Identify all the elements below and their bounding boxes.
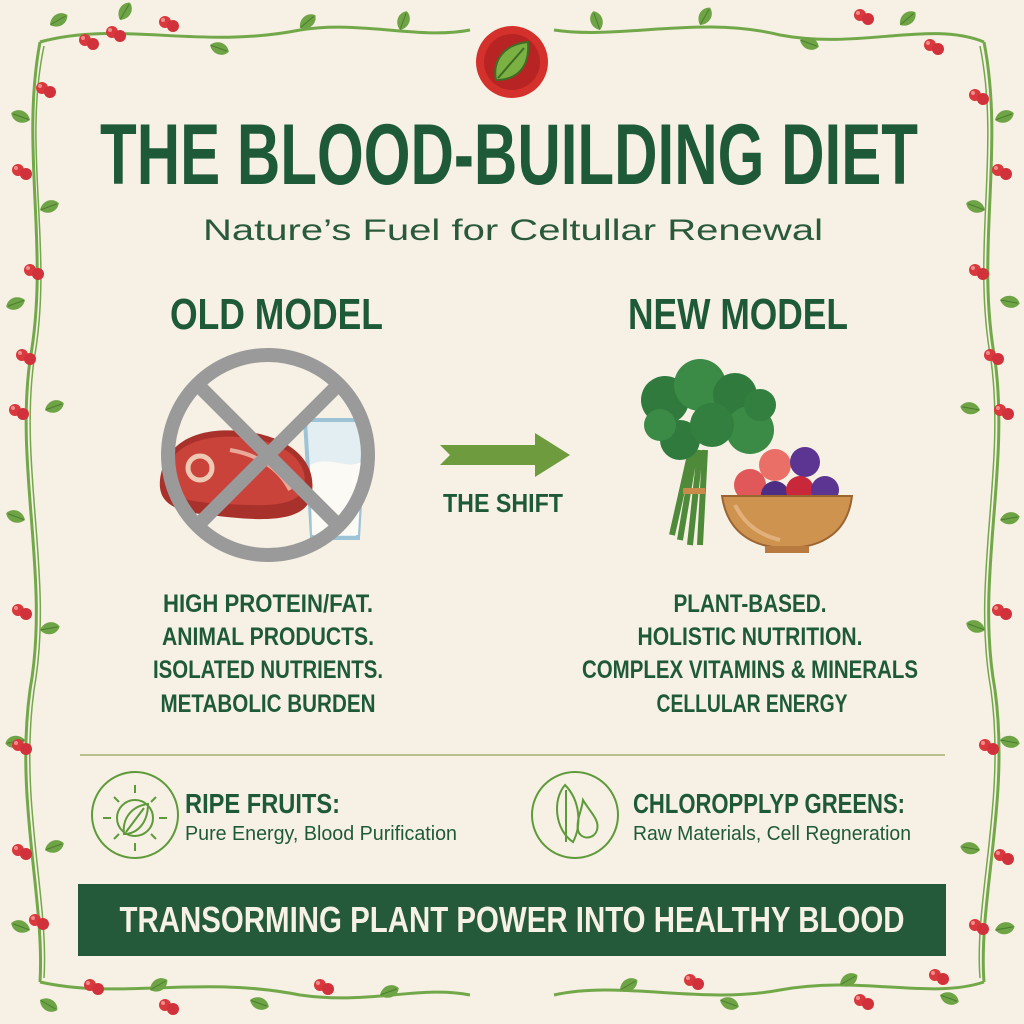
text: new model list xyxy=(582,590,918,718)
text: ripe fruits: Pure Energy, Blood Purification xyxy=(185,823,457,845)
heading: old model: OLD MODEL xyxy=(170,290,383,339)
text: old model list: ANIMAL PRODUCTS. xyxy=(162,623,374,651)
text: chlorophyll greens: CHLOROPPLYP GREENS: xyxy=(633,788,905,819)
text: new model list: CELLULAR ENERGY xyxy=(656,690,848,718)
text: old model list: HIGH PROTEIN/FAT. xyxy=(163,590,373,618)
text: new model list: PLANT-BASED. xyxy=(674,590,826,618)
arrow: the shift xyxy=(440,433,570,518)
text: new model list: HOLISTIC NUTRITION. xyxy=(638,623,862,651)
heading: new model: NEW MODEL xyxy=(628,290,848,339)
text: old model list: ISOLATED NUTRIENTS. xyxy=(153,656,383,684)
subtitle: Nature’s Fuel for Celtullar Renewal xyxy=(203,214,823,247)
text: old model list: METABOLIC BURDEN xyxy=(160,690,376,718)
text: ripe fruits: RIPE FRUITS: xyxy=(185,788,340,819)
text: new model list: COMPLEX VITAMINS & MINERALS xyxy=(582,656,918,684)
illustration: meat and milk crossed out xyxy=(160,355,368,555)
text: old model list xyxy=(153,590,383,718)
text: chlorophyll greens xyxy=(633,788,911,845)
icon: leaf and drop xyxy=(532,772,618,858)
icon: blood cell with leaf xyxy=(476,26,548,98)
illustration: greens and fruit bowl xyxy=(641,359,852,553)
banner xyxy=(78,884,946,956)
text: ripe fruits xyxy=(185,788,457,845)
arrow: the shift: THE SHIFT xyxy=(443,488,563,518)
text: chlorophyll greens: Raw Materials, Cell Regneration xyxy=(633,823,911,845)
icon: sun leaf xyxy=(92,772,178,858)
